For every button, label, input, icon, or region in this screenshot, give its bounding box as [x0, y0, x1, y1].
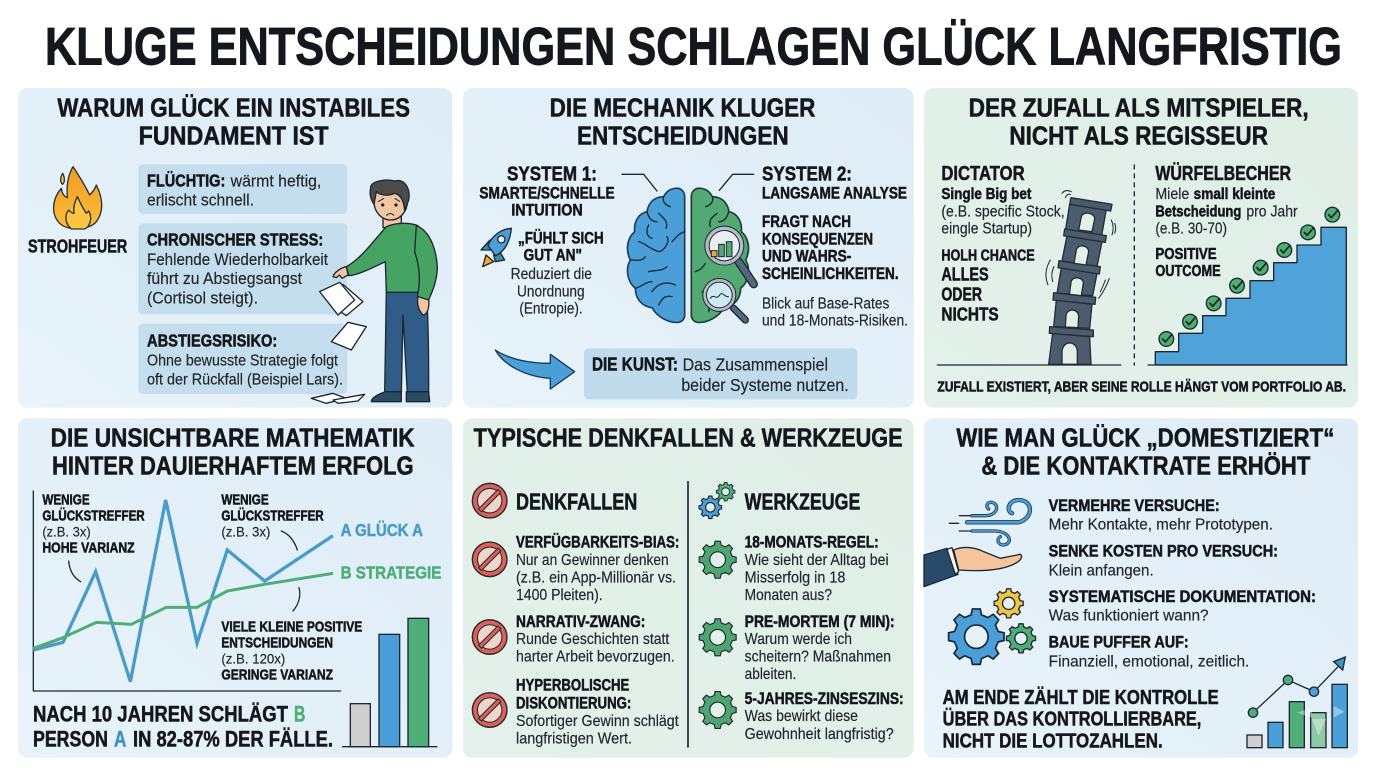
- text: System 2: und 18-Monats-Risiken.: [762, 313, 908, 330]
- heading: ENTSCHEIDUNGEN: [577, 120, 789, 150]
- panel background: [18, 88, 452, 408]
- panel background: [924, 418, 1358, 758]
- conclusion: IN 82-87% DER FÄLLE.: [133, 727, 333, 752]
- list: actions: Klein anfangen.: [1049, 562, 1154, 579]
- heading: TYPISCHE DENKFALLEN & WERKZEUGE: [474, 423, 903, 453]
- icon: flame: [54, 167, 102, 229]
- annotation: left: HOHE VARIANZ: [42, 540, 135, 556]
- heading: DER ZUFALL ALS MITSPIELER,: [969, 93, 1309, 123]
- item: Verfügbarkeits-Bias: [516, 533, 679, 604]
- item: Narrativ-Zwang: NARRATIV-ZWANG:: [516, 612, 645, 631]
- heading: & DIE KONTAKTRATE ERHÖHT: [981, 450, 1310, 480]
- text: System 2: FRAGT NACH: [762, 212, 851, 231]
- column: Werkzeuge: [699, 482, 904, 743]
- text: System 1: (Entropie).: [519, 301, 583, 318]
- line chart: [33, 491, 341, 691]
- conclusion: NICHT DIE LOTTOZAHLEN.: [943, 729, 1163, 752]
- annotation: right top: GLÜCKSTREFFER: [221, 507, 324, 524]
- text: System 2: KONSEQUENZEN: [762, 229, 873, 248]
- text: Dictator: HOLH CHANCE: [941, 248, 1035, 265]
- item: Verfügbarkeits-Bias: (z.B. ein App-Millionär vs.: [516, 569, 676, 586]
- item: 5-Jahres-Zinseszins: Gewohnheit langfristig?: [745, 726, 894, 743]
- item: Hyperbolische Diskontierung: langfristigen Wert.: [516, 730, 632, 747]
- heading: FUNDAMENT IST: [139, 120, 329, 150]
- panel: Der Zufall als Mitspieler: [924, 88, 1358, 408]
- panel: Warum Glück ein instabiles Fundament ist: [18, 88, 452, 408]
- item: Pre-Mortem: Warum werde ich: [745, 631, 852, 648]
- heading: Werkzeuge: WERKZEUGE: [745, 488, 860, 514]
- text: Dictator: DICTATOR: [941, 163, 1025, 185]
- icon: prohibition: [472, 693, 507, 727]
- leader lines: [622, 174, 754, 191]
- text: System 2: [762, 164, 908, 330]
- text: System 1: INTUITION: [511, 201, 583, 220]
- illustration: sad man dropping papers: [311, 180, 437, 403]
- motion marks: [1046, 191, 1116, 298]
- conclusion: NACH 10 JAHREN SCHLÄGT: [33, 702, 288, 727]
- text: System 1: SMARTE/SCHNELLE: [479, 183, 615, 202]
- chart: staircase: [1148, 207, 1347, 365]
- heading: [51, 423, 415, 480]
- list: actions: Finanziell, emotional, zeitlich.: [1049, 654, 1249, 671]
- callout: Die Kunst: DIE KUNST:: [592, 354, 678, 375]
- item: 18-Monats-Regel: Monaten aus?: [745, 587, 832, 604]
- panel background: [924, 88, 1358, 408]
- annotation: right top: (z.B. 3x): [221, 524, 270, 540]
- divider: [685, 481, 690, 748]
- text: System 2: SYSTEM 2:: [762, 164, 852, 186]
- list: actions: Was funktioniert wann?: [1049, 608, 1209, 625]
- icon: prohibition: [472, 620, 507, 654]
- heading: DIE MECHANIK KLUGER: [550, 93, 816, 123]
- illustration: leaning tower: [1049, 198, 1112, 364]
- panel: Typische Denkfallen & Werkzeuge: [463, 418, 914, 758]
- icon: prohibition: [472, 483, 507, 518]
- icon: two gears: [699, 482, 735, 519]
- icon: magnifier with curve: [705, 280, 745, 320]
- heading: DIE UNSICHTBARE MATHEMATIK: [51, 423, 415, 453]
- conclusion: A: [114, 727, 126, 752]
- list: actions: SENKE KOSTEN PRO VERSUCH:: [1049, 542, 1278, 561]
- icon: brain: [627, 188, 749, 322]
- text: Dictator: (e.B. specific Stock,: [941, 203, 1065, 220]
- icon: gear: [699, 619, 736, 656]
- text: Dictator: Single Big bet: [941, 186, 1031, 203]
- item: 5-Jahres-Zinseszins: Was bewirkt diese: [745, 708, 858, 725]
- icon: prohibition: [472, 542, 507, 577]
- item: Hyperbolische Diskontierung: DISKONTIERUNG:: [516, 693, 631, 712]
- callout: flüchtig: erlischt schnell.: [147, 191, 254, 210]
- heading: WARUM GLÜCK EIN INSTABILES: [57, 93, 410, 123]
- annotation: right bottom: ENTSCHEIDUNGEN: [221, 635, 333, 651]
- text: Würfelbecher: OUTCOME: [1155, 263, 1221, 280]
- list: actions: BAUE PUFFER AUF:: [1049, 633, 1189, 652]
- panel background: [18, 418, 452, 758]
- icon: gear: [699, 692, 736, 728]
- text: System 1: SYSTEM 1:: [507, 164, 597, 186]
- annotation: right bottom: [221, 588, 362, 683]
- item: Hyperbolische Diskontierung: [516, 676, 679, 747]
- item: Pre-Mortem: ableiten.: [745, 666, 796, 683]
- text: System 2: UND WAHRS-: [762, 247, 851, 266]
- text: Würfelbecher: POSITIVE: [1155, 246, 1217, 263]
- panel background: [463, 418, 914, 758]
- text: Würfelbecher: (e.B. 30-70): [1155, 220, 1227, 237]
- annotation: left: WENIGE: [42, 492, 90, 508]
- callout: Abstiegsrisiko: Ohne bewusste Strategie folgt: [147, 353, 339, 370]
- text: Dictator: NICHTS: [941, 303, 999, 324]
- heading: HINTER DAUIERHAFTEM ERFOLG: [52, 450, 414, 480]
- item: 18-Monats-Regel: Misserfolg in 18: [745, 569, 845, 586]
- callout: flüchtig: FLÜCHTIG:: [147, 171, 225, 191]
- legend: A Glück A: A GLÜCK A: [341, 520, 423, 540]
- item: 5-Jahres-Zinseszins: [745, 689, 904, 743]
- callout: Abstiegsrisiko: ABSTIEGSRISIKO:: [147, 331, 277, 351]
- callout: chronischer Stress: führt zu Abstiegsangst: [147, 269, 302, 288]
- callout: chronischer Stress: Fehlende Wiederholbarkeit: [147, 250, 328, 269]
- legend: B Strategie: B STRATEGIE: [341, 562, 442, 582]
- conclusion: AM ENDE ZÄHLT DIE KONTROLLE: [943, 686, 1219, 709]
- text: Würfelbecher: Betscheidung: [1155, 203, 1241, 220]
- item: 18-Monats-Regel: 18-MONATS-REGEL:: [745, 533, 879, 552]
- panel: Die Mechanik kluger Entscheidungen: [463, 88, 914, 408]
- item: Hyperbolische Diskontierung: Sofortiger Gewinn schlägt: [516, 713, 679, 730]
- heading: Denkfallen: DENKFALLEN: [516, 488, 637, 514]
- panel: Wie man Glück domestiziert: [924, 418, 1358, 758]
- callout: chronischer Stress: [138, 223, 347, 314]
- arrow: [495, 350, 575, 389]
- annotation: right top: [221, 492, 324, 550]
- conclusion: B: [294, 702, 305, 727]
- text: Dictator: ALLES: [941, 264, 989, 285]
- icon: rocket: [481, 228, 511, 267]
- conclusion: ÜBER DAS KONTROLLIERBARE,: [943, 708, 1201, 731]
- ground line: [937, 363, 1121, 367]
- heading: [969, 93, 1309, 150]
- icon: open hand: [924, 547, 1022, 587]
- text: Würfelbecher: small kleinte: [1194, 186, 1275, 203]
- list: actions: SYSTEMATISCHE DOKUMENTATION:: [1049, 587, 1316, 606]
- text: System 2: SCHEINLICHKEITEN.: [762, 264, 899, 283]
- annotation: left: [42, 492, 145, 582]
- item: Pre-Mortem: scheitern? Maßnahmen: [745, 649, 891, 666]
- callout: Die Kunst: [584, 348, 857, 399]
- icon: gear: [699, 541, 736, 578]
- conclusion: [33, 702, 333, 752]
- panel: Die unsichtbare Mathematik: [18, 418, 452, 758]
- item: Pre-Mortem: [745, 612, 895, 683]
- heading: NICHT ALS REGISSEUR: [1009, 120, 1268, 150]
- bar chart: [342, 618, 437, 747]
- item: Verfügbarkeits-Bias: Nur an Gewinner denken: [516, 552, 669, 569]
- text: System 1: GUT AN": [524, 246, 582, 265]
- text: Würfelbecher: [1155, 162, 1298, 280]
- callout: Abstiegsrisiko: [138, 324, 347, 394]
- icon: wind: [949, 500, 1030, 545]
- icon: gears: [949, 589, 1036, 664]
- text: Dictator: eingle Startup): [941, 220, 1032, 237]
- annotation: left: (z.B. 3x): [42, 524, 91, 540]
- icon: magnifier with chart: [707, 228, 754, 284]
- list: actions: Mehr Kontakte, mehr Prototypen.: [1049, 517, 1273, 534]
- annotation: right top: WENIGE: [221, 492, 269, 508]
- annotation: right bottom: VIELE KLEINE POSITIVE: [221, 620, 362, 636]
- divider: [1132, 164, 1136, 366]
- item: 18-Monats-Regel: [745, 533, 889, 604]
- text: System 1: [479, 164, 615, 318]
- item: 18-Monats-Regel: Wie sieht der Alltag bei: [745, 552, 889, 569]
- text: System 1: Reduziert die: [511, 266, 592, 283]
- callout: Die Kunst: beider Systeme nutzen.: [681, 375, 849, 395]
- annotation: right bottom: GERINGE VARIANZ: [221, 667, 333, 683]
- callout: chronischer Stress: CHRONISCHER STRESS:: [147, 230, 323, 250]
- text: Würfelbecher: WÜRFELBECHER: [1155, 162, 1291, 185]
- callout: Die Kunst: Das Zusammenspiel: [683, 355, 828, 375]
- text: Dictator: ODER: [941, 284, 982, 305]
- item: Verfügbarkeits-Bias: VERFÜGBARKEITS-BIAS:: [516, 533, 679, 552]
- heading: [550, 93, 816, 150]
- label: Strohfeuer: STROHFEUER: [28, 235, 127, 256]
- annotation: left: GLÜCKSTREFFER: [42, 507, 145, 524]
- annotation: right bottom: (z.B. 120x): [221, 651, 285, 667]
- heading: [956, 423, 1334, 480]
- callout: Abstiegsrisiko: oft der Rückfall (Beispiel Lars).: [147, 371, 343, 388]
- callout: flüchtig: [138, 164, 347, 214]
- text: System 2: Blick auf Base-Rates: [762, 295, 890, 312]
- callout: chronischer Stress: (Cortisol steigt).: [147, 288, 258, 307]
- text: Würfelbecher: Miele: [1155, 186, 1189, 203]
- conclusion: [943, 686, 1219, 752]
- chart: growth bars with trend arrow: [1247, 657, 1347, 748]
- text: Würfelbecher: pro Jahr: [1246, 203, 1298, 220]
- item: Verfügbarkeits-Bias: 1400 Pleiten).: [516, 587, 603, 604]
- item: 5-Jahres-Zinseszins: 5-JAHRES-ZINSESZINS:: [745, 689, 904, 708]
- item: Narrativ-Zwang: harter Arbeit bevorzugen.: [516, 649, 675, 666]
- list: actions: VERMEHRE VERSUCHE:: [1049, 496, 1220, 515]
- heading: [57, 93, 410, 150]
- item: Hyperbolische Diskontierung: HYPERBOLISCHE: [516, 676, 629, 695]
- text: Dictator: [941, 163, 1065, 324]
- list: actions: [1049, 496, 1316, 671]
- item: Pre-Mortem: PRE-MORTEM (7 MIN):: [745, 612, 895, 631]
- panel background: [463, 88, 914, 408]
- item: Narrativ-Zwang: Runde Geschichten statt: [516, 631, 670, 648]
- text: System 1: Unordnung: [517, 283, 585, 300]
- column: Denkfallen: [472, 483, 679, 747]
- conclusion: PERSON: [33, 727, 108, 752]
- text: System 1: „FÜHLT SICH: [518, 228, 604, 247]
- item: Narrativ-Zwang: [516, 612, 675, 666]
- callout: flüchtig: wärmt heftig,: [230, 172, 321, 191]
- text: System 2: LANGSAME ANALYSE: [762, 183, 907, 202]
